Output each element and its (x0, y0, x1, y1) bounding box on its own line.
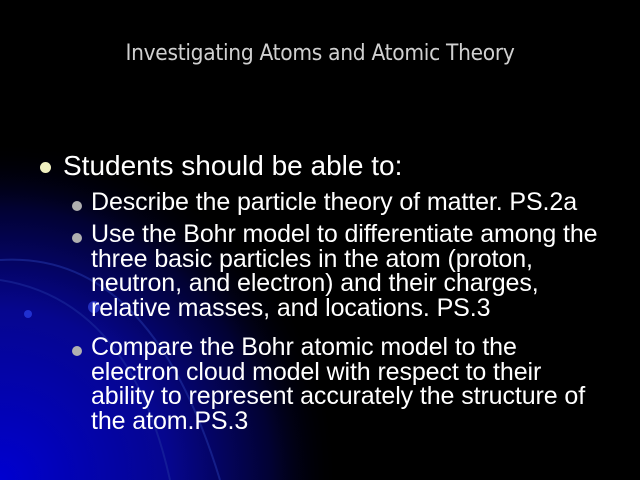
text: electron cloud model with respect to their (91, 358, 541, 386)
text: the atom.PS.3 (91, 407, 248, 435)
title: Investigating Atoms and Atomic Theory (125, 40, 515, 66)
main bullet text: Students should be able to: (63, 150, 402, 181)
sub bullets (72, 188, 597, 435)
text: Describe the particle theory of matter. PS.2a (91, 188, 577, 216)
text: three basic particles in the atom (proton, (91, 245, 533, 273)
text: Compare the Bohr atomic model to the (91, 333, 517, 361)
text: neutron, and electron) and their charges, (91, 269, 539, 297)
text: relative masses, and locations. PS.3 (91, 294, 490, 322)
text: Use the Bohr model to differentiate among the (91, 220, 597, 248)
text: ability to represent accurately the structure of (91, 382, 585, 410)
main bullet (40, 162, 51, 173)
